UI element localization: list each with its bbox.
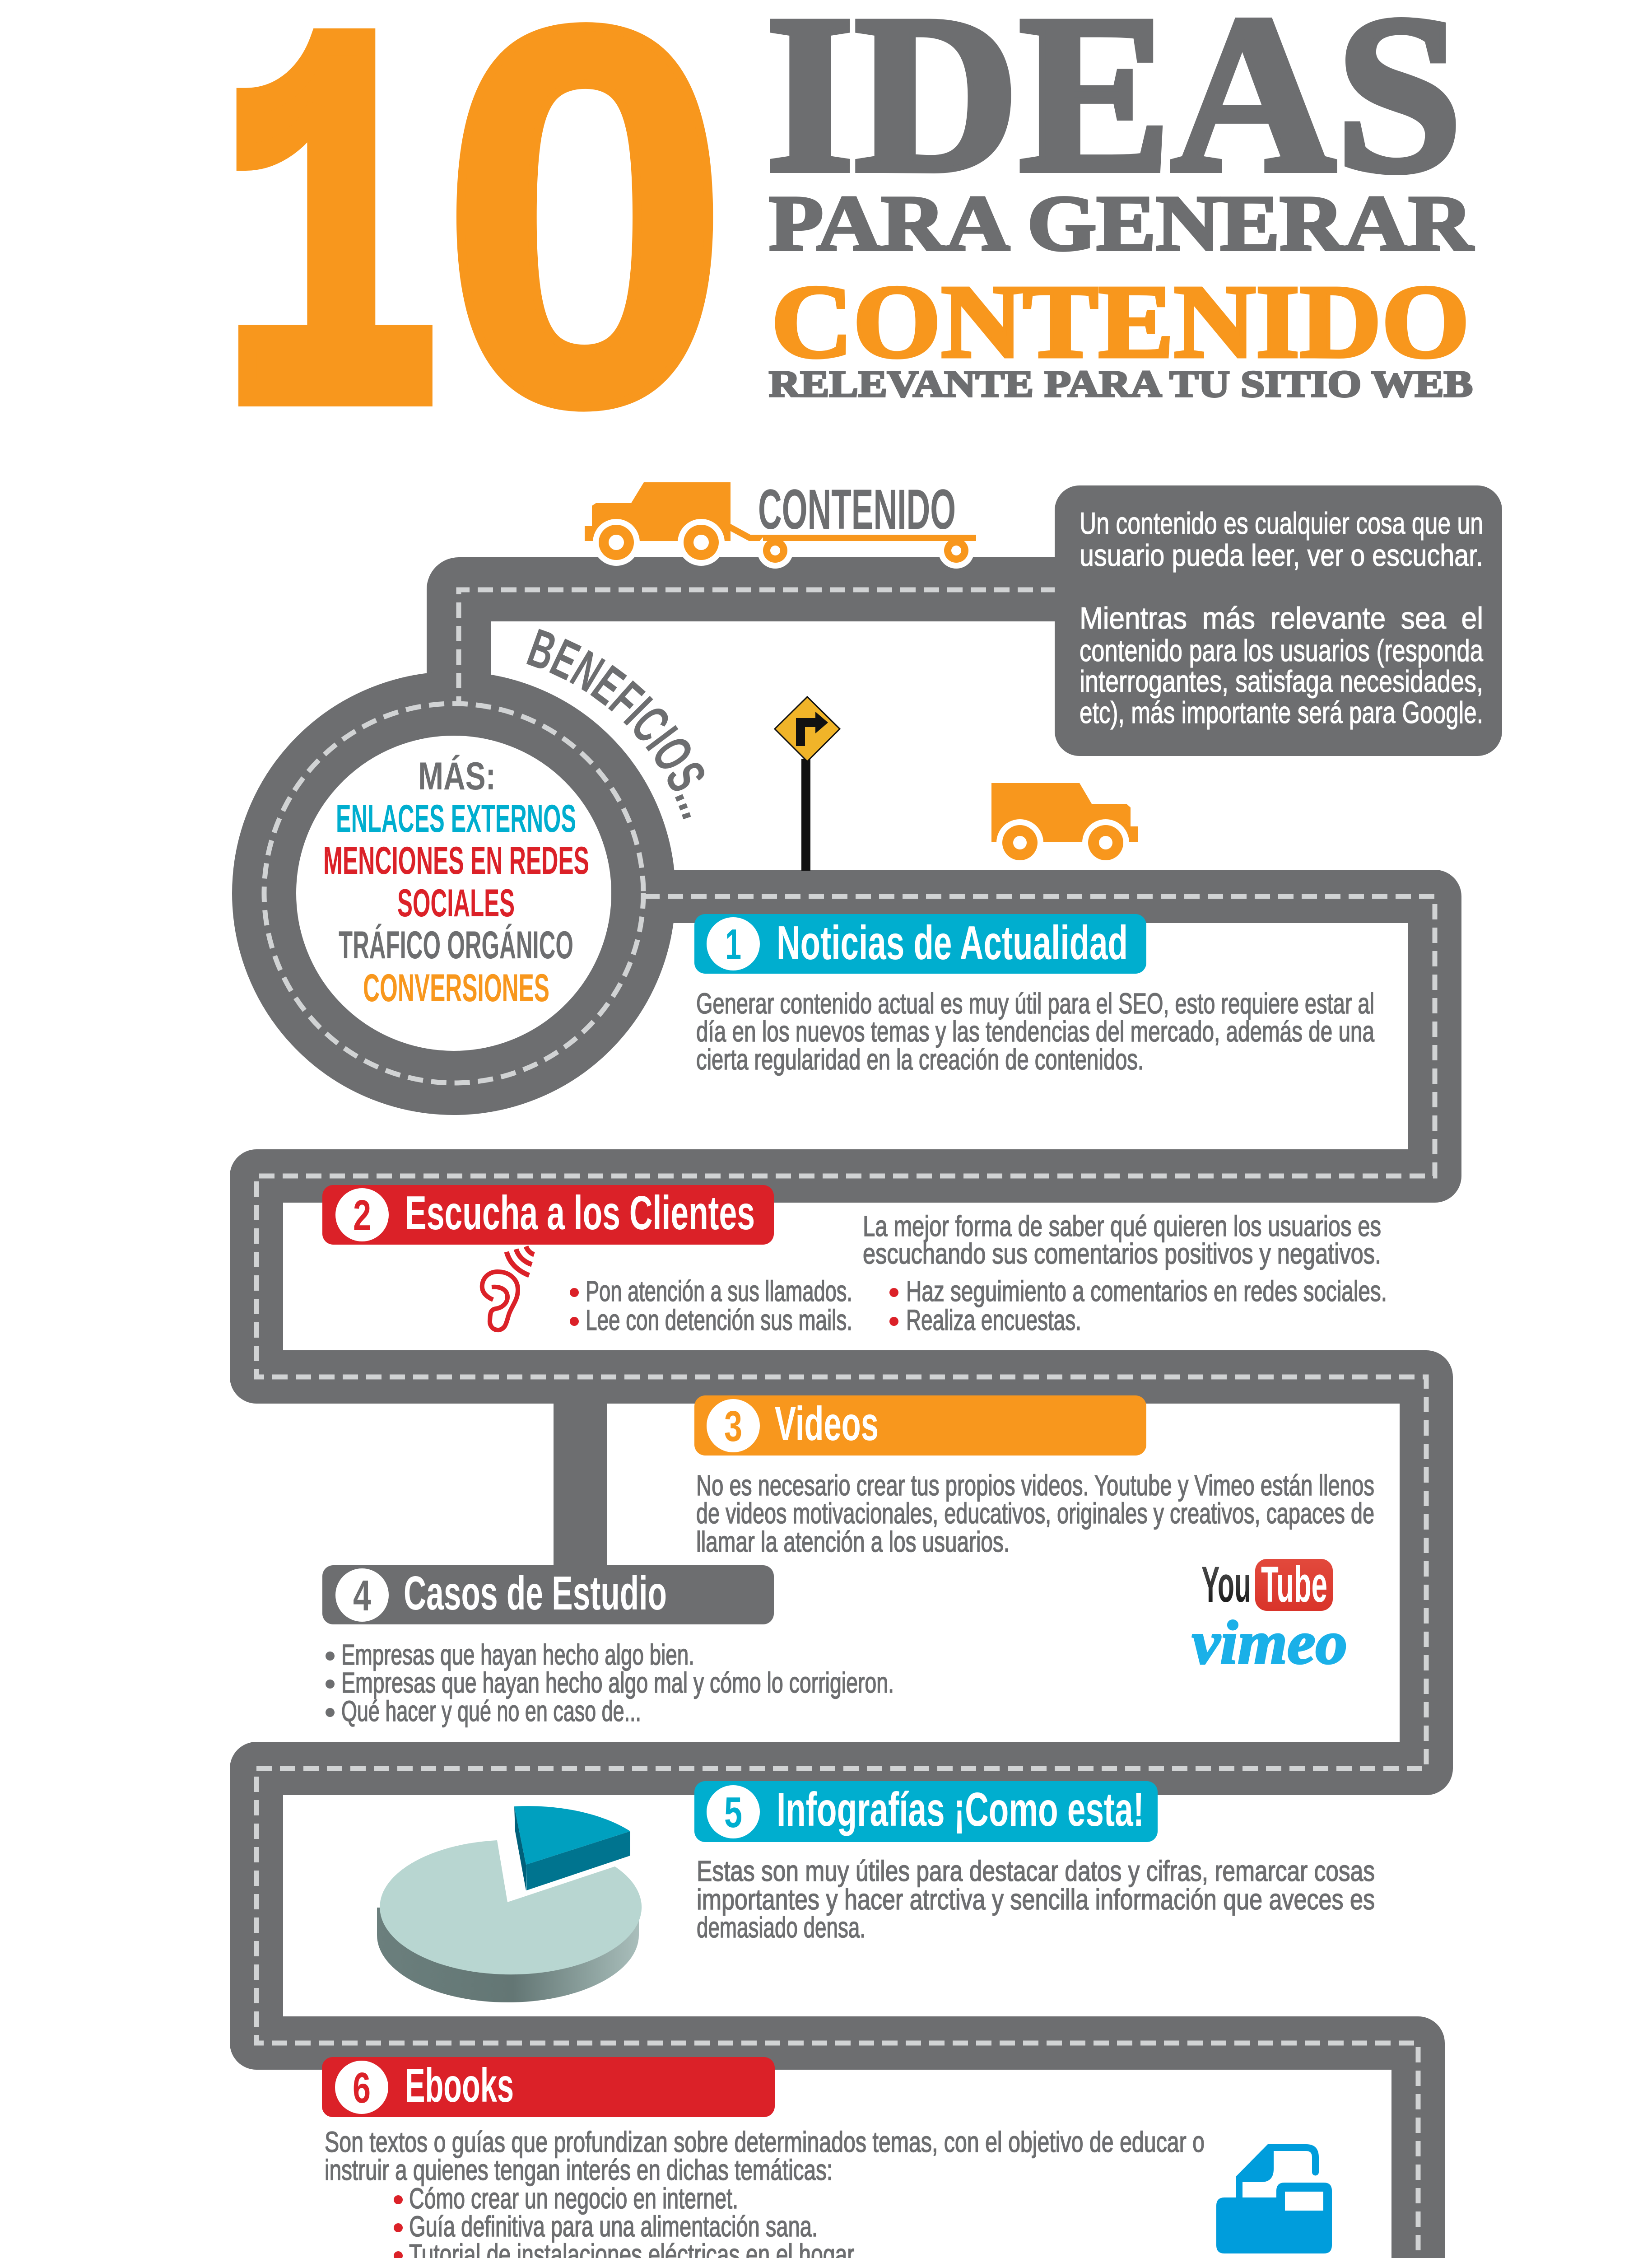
panel: definition: interrogantes, satisfaga necesidades,: [1080, 664, 1483, 699]
heading: noticias: 1: [725, 920, 741, 969]
bullet list: Guía definitiva para una alimentación sana.: [409, 2210, 818, 2243]
title line: para generar: PARA GENERAR: [769, 179, 1474, 267]
heading: videos: [694, 1395, 1146, 1456]
bullet list left: Pon atención a sus llamados.: [586, 1275, 852, 1307]
benefits list: MENCIONES EN REDES: [323, 839, 589, 882]
road lane dashes: [173, 590, 1518, 2258]
section 4: [322, 1565, 894, 1727]
heading: ebooks: 6: [353, 2064, 371, 2112]
big number 10: [221, 0, 730, 554]
section 5: [377, 1781, 1375, 2002]
heading: videos: Videos: [775, 1397, 879, 1451]
label: contenido: CONTENIDO: [758, 478, 956, 541]
icon: youtube logo: You: [1201, 1556, 1251, 1613]
panel: definition: usuario pueda leer, ver o escuchar.: [1080, 538, 1483, 573]
heading: casos de estudio: Casos de Estudio: [404, 1567, 667, 1620]
benefits list: CONVERSIONES: [363, 966, 549, 1010]
icon: vimeo logo: vimeo: [1192, 1608, 1347, 1677]
text block: día en los nuevos temas y las tendencias del mercado, además de una: [696, 1015, 1374, 1048]
bullet list left: Lee con detención sus mails.: [586, 1304, 852, 1336]
section 3: [694, 1395, 1374, 1677]
icon: youtube logo: Tube: [1261, 1556, 1327, 1613]
panel: definition: Mientras más relevante sea el: [1080, 601, 1483, 635]
heading: noticias: Noticias de Actualidad: [777, 916, 1128, 970]
bullet list right: Haz seguimiento a comentarios en redes sociales.: [906, 1275, 1387, 1307]
section 6: [322, 2057, 1332, 2258]
text block: cierta regularidad en la creación de contenidos.: [696, 1043, 1144, 1076]
benefits list: ENLACES EXTERNOS: [336, 797, 576, 840]
heading: videos: 3: [724, 1402, 742, 1451]
bullet list: [394, 2182, 859, 2258]
heading: escucha: [322, 1185, 774, 1245]
bullet list left: [570, 1275, 852, 1336]
heading: casos de estudio: 4: [353, 1572, 371, 1620]
heading: infografias: Infografías ¡Como esta!: [777, 1783, 1144, 1836]
section 1: [694, 914, 1374, 1076]
title line: relevante: RELEVANTE PARA TU SITIO WEB: [769, 363, 1473, 405]
bullet list: Empresas que hayan hecho algo mal y cómo lo corrigieron.: [341, 1666, 894, 1699]
text block: Estas son muy útiles para destacar datos y cifras, remarcar cosas: [697, 1855, 1375, 1887]
heading: noticias: [694, 914, 1146, 974]
benefits list: MÁS:: [418, 755, 496, 798]
benefits list: [323, 755, 589, 1010]
panel: benefits circle: [323, 617, 731, 1010]
heading: escucha: Escucha a los Clientes: [405, 1186, 755, 1240]
heading: ebooks: [322, 2057, 775, 2117]
bullet list right: [889, 1275, 1387, 1336]
chart: 3d pie: [377, 1806, 642, 2002]
bullet list: Qué hacer y qué no en caso de...: [341, 1695, 641, 1727]
heading: casos de estudio: [322, 1565, 774, 1624]
title: [221, 0, 1474, 554]
text block: Generar contenido actual es muy útil para el SEO, esto requiere estar al: [696, 987, 1374, 1020]
text block: llamar la atención a los usuarios.: [696, 1526, 1010, 1558]
title line: contenido: CONTENIDO: [771, 264, 1470, 380]
text block: Son textos o guías que profundizan sobre determinados temas, con el objetivo de educar o: [325, 2126, 1205, 2158]
panel: definition: contenido para los usuarios (responda: [1080, 634, 1483, 668]
icon: road sign: [775, 697, 840, 871]
bullet list: Cómo crear un negocio en internet.: [409, 2182, 738, 2215]
panel: definition: etc), más importante será para Google.: [1080, 695, 1483, 730]
heading: ebooks: Ebooks: [405, 2059, 514, 2112]
text block: [863, 1210, 1381, 1270]
text block: La mejor forma de saber qué quieren los usuarios es: [863, 1210, 1381, 1242]
heading: escucha: 2: [353, 1191, 371, 1240]
panel: definition: [1055, 485, 1502, 756]
text block: demasiado densa.: [697, 1911, 866, 1944]
text block: de videos motivacionales, educativos, originales y creativos, capaces de: [696, 1497, 1374, 1530]
text block: [696, 1469, 1374, 1558]
text block: [696, 987, 1374, 1076]
text block: instruir a quienes tengan interés en dichas temáticas:: [325, 2154, 833, 2186]
bullet list: Empresas que hayan hecho algo bien.: [341, 1638, 694, 1671]
curved heading: BENEFICIOS...: [520, 617, 731, 825]
text block: [325, 2126, 1205, 2186]
benefits list: TRÁFICO ORGÁNICO: [339, 924, 573, 967]
text block: No es necesario crear tus propios videos. Youtube y Vimeo están llenos: [696, 1469, 1374, 1502]
icon: orange truck: [991, 783, 1138, 866]
truck with trailer: [585, 482, 976, 569]
heading: infografias: [694, 1781, 1158, 1842]
icon: document folder: [1216, 2144, 1332, 2253]
text block: [697, 1855, 1375, 1944]
road network: [172, 589, 1542, 2258]
benefits list: SOCIALES: [397, 882, 515, 925]
panel: definition: Un contenido es cualquier cosa que un: [1080, 506, 1483, 541]
icon: youtube logo: [1201, 1556, 1333, 1613]
heading: infografias: 5: [724, 1788, 742, 1837]
text block: escuchando sus comentarios positivos y negativos.: [863, 1237, 1381, 1270]
bullet list: [326, 1638, 894, 1727]
section 2: [322, 1185, 1387, 1336]
bullet list right: Realiza encuestas.: [906, 1304, 1081, 1336]
icon: ear: [482, 1246, 534, 1330]
text block: importantes y hacer atrctiva y sencilla información que aveces es: [697, 1883, 1375, 1916]
